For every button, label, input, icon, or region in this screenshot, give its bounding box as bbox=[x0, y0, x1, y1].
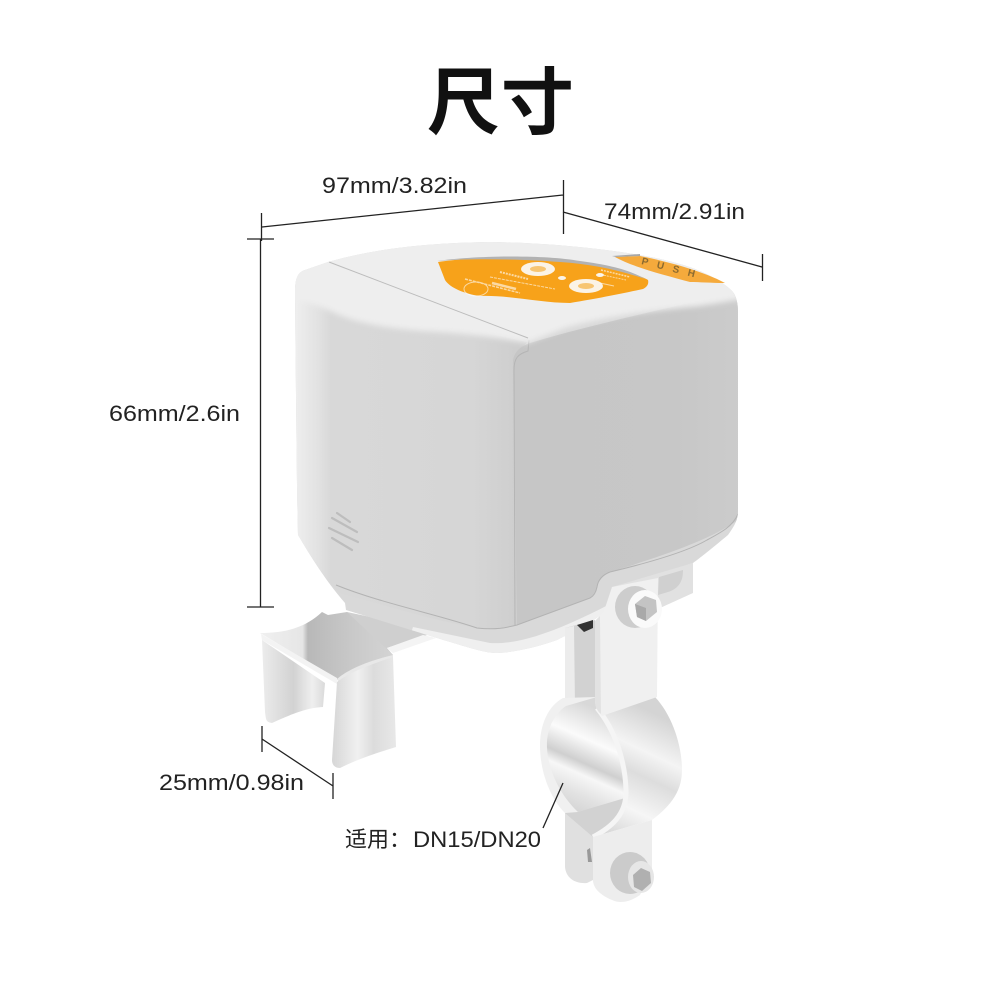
left mounting bracket bbox=[260, 612, 440, 768]
dimension: width 97mm: 97mm/3.82in bbox=[322, 173, 467, 198]
orange PUSH button: PUSH bbox=[640, 256, 705, 282]
pipe size label: 适用： bbox=[345, 827, 411, 852]
dimension: height 66mm bbox=[109, 239, 274, 607]
clamp rear strap bbox=[565, 620, 595, 883]
orange PUSH button bbox=[612, 254, 725, 283]
face seam bbox=[514, 340, 529, 625]
pipe size leader line bbox=[543, 783, 563, 828]
clamp front strap bbox=[593, 578, 658, 902]
top seam bbox=[329, 262, 528, 338]
dimension: height 66mm: 66mm/2.6in bbox=[109, 401, 240, 426]
valve housing bbox=[285, 230, 750, 660]
top face bbox=[295, 242, 737, 345]
speaker grille bbox=[329, 513, 358, 550]
dimension: depth 74mm: 74mm/2.91in bbox=[604, 199, 745, 224]
housing rim base bbox=[290, 240, 745, 660]
rear tab of clamp bbox=[612, 563, 693, 620]
pipe size label: DN15/DN20 bbox=[413, 827, 541, 852]
bottom lip highlight bbox=[412, 606, 606, 653]
top hex bolt bbox=[615, 586, 662, 628]
bottom hex bolt bbox=[610, 852, 654, 894]
dimension: width 97mm bbox=[262, 173, 564, 241]
right face bbox=[513, 290, 745, 625]
bottom edge line bbox=[336, 514, 738, 629]
title: 尺寸 bbox=[427, 63, 575, 144]
dimension: depth 74mm bbox=[563, 199, 762, 281]
left face bbox=[290, 290, 527, 628]
dimension: bracket 25mm bbox=[159, 726, 333, 799]
orange control panel bbox=[437, 256, 648, 303]
pipe clamp bbox=[540, 697, 682, 837]
dimension: bracket 25mm: 25mm/0.98in bbox=[159, 770, 304, 795]
pipe size label bbox=[345, 827, 541, 852]
